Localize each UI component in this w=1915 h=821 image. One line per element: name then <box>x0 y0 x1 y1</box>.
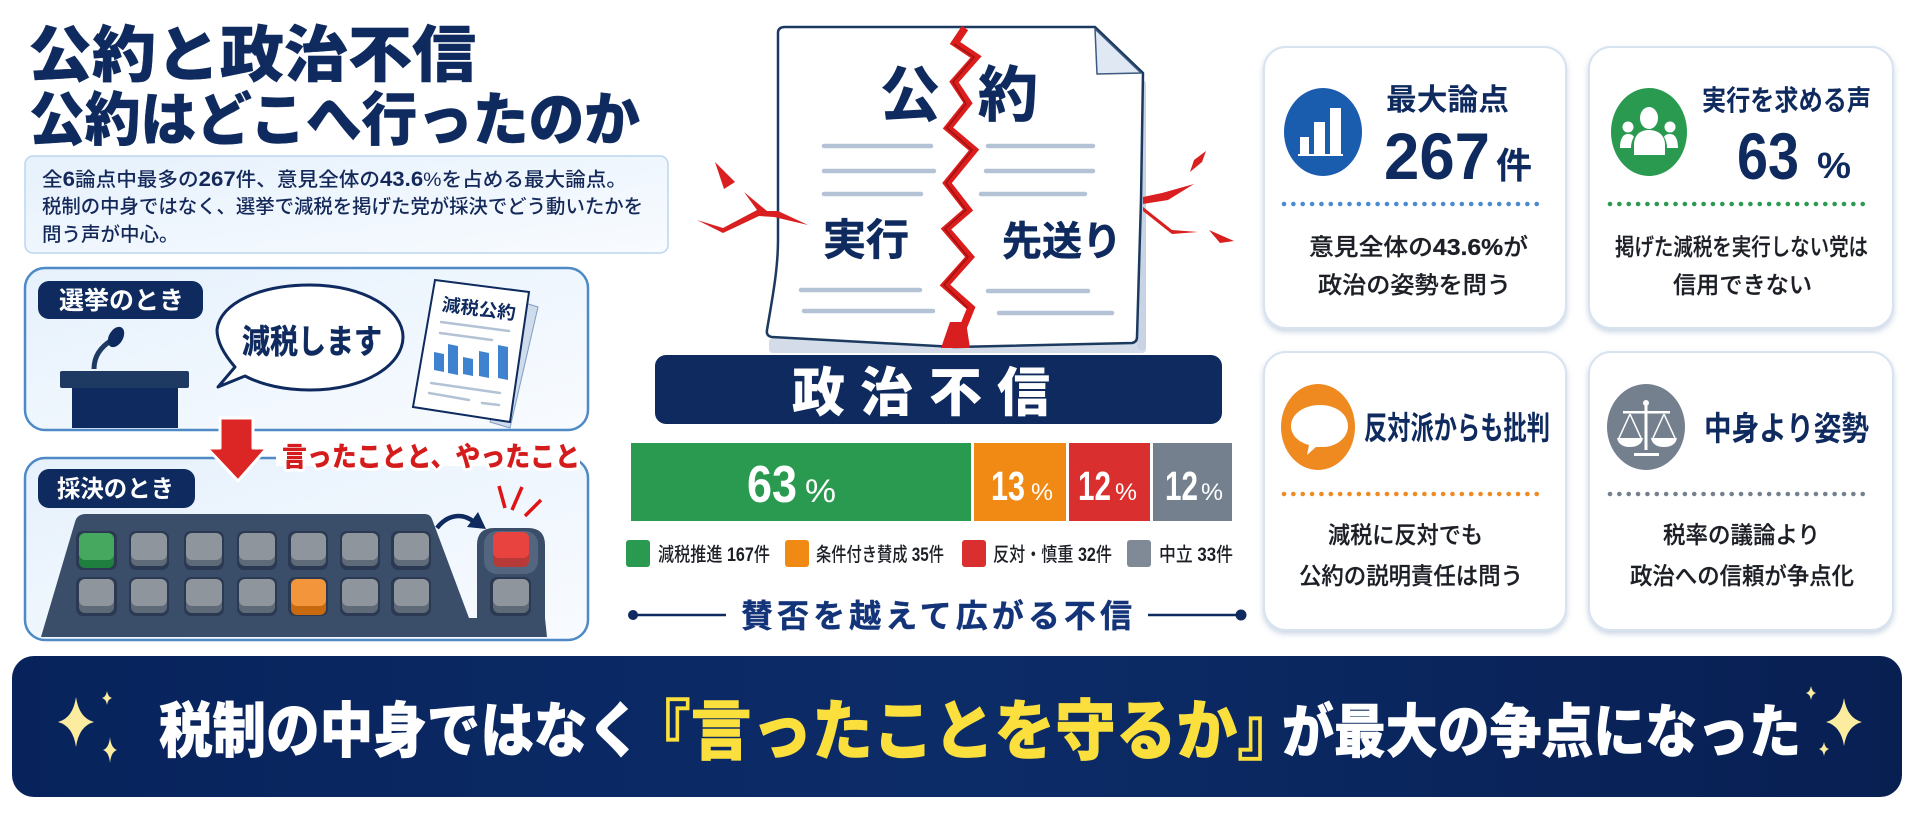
conclusion text: が最大の争点になった <box>1282 700 1801 765</box>
description <box>1299 522 1523 589</box>
summary text box: 問う声が中心。 <box>42 224 179 246</box>
arrow: red down arrow <box>207 418 267 481</box>
conclusion text: 『言ったことを守るか』 <box>630 694 1298 768</box>
description: 政治への信頼が争点化 <box>1630 563 1854 589</box>
conclusion text: 税制の中身ではなく <box>159 698 641 765</box>
tag: election: 選挙のとき <box>59 287 184 315</box>
red alert ticks <box>499 486 541 516</box>
icon: sparkles left <box>58 691 117 763</box>
label: implement: 実行 <box>823 217 909 265</box>
description: 減税に反対でも <box>1328 522 1483 548</box>
stat: 267: 件 <box>1496 145 1532 186</box>
card: biggest issue <box>1264 47 1566 328</box>
bar: opposed 12% <box>1069 443 1150 521</box>
description <box>1630 522 1854 589</box>
bar: neutral 12%: % <box>1201 479 1223 506</box>
bar: conditional 13%: 13 <box>991 463 1025 509</box>
central crack <box>941 28 976 348</box>
description: 税率の議論より <box>1663 522 1820 548</box>
bar: opposed 12%: 12 <box>1078 463 1111 509</box>
document text lines <box>801 146 1112 313</box>
stacked bar chart <box>631 443 1232 521</box>
card: criticism from opponents <box>1264 352 1566 630</box>
voting buttons <box>76 531 531 616</box>
illustration: torn pledge document <box>697 27 1234 353</box>
stat: 267: 267 <box>1384 119 1490 193</box>
heading: 実行を求める声 <box>1702 85 1871 116</box>
summary text box: 全6論点中最多の 267件、意見全体の 43.6%を占める最大論点。 <box>42 168 627 191</box>
summary text box: 税制の中身ではなく、選挙で減税を掲げた党が採決でどう動いたかを <box>42 196 643 218</box>
tag: election <box>38 281 203 319</box>
description: 信用できない <box>1673 272 1812 298</box>
side cracks and shards <box>697 151 1234 243</box>
document sheet <box>767 27 1146 353</box>
bar: promote 63%: 63 <box>747 456 797 514</box>
card: stance over substance <box>1589 352 1893 630</box>
speech bubble <box>217 285 403 390</box>
legend <box>626 540 1233 567</box>
speech bubble: 減税します <box>242 323 382 360</box>
stat: 63% <box>1737 119 1851 193</box>
document heading: 約 <box>978 62 1038 129</box>
panel: vote time <box>25 458 588 640</box>
stat: 63%: % <box>1817 145 1851 186</box>
description: 意見全体の 43.6%が <box>1309 234 1528 260</box>
title: 公約と政治不信 <box>28 21 476 89</box>
icon: sparkles right <box>1806 686 1862 756</box>
icon: scales <box>1607 384 1685 470</box>
heading: 反対派からも批判 <box>1364 410 1550 446</box>
subheading: distrust spreads beyond pro and con <box>628 598 1246 634</box>
voting board <box>41 486 547 637</box>
bar: promote 63%: % <box>805 473 836 509</box>
description: 公約の説明責任は問う <box>1299 563 1523 589</box>
heading: 中身より姿勢 <box>1704 410 1869 447</box>
description: 政治の姿勢を問う <box>1318 272 1511 298</box>
document heading: 公 <box>880 62 940 129</box>
icon: tax cut pledge document <box>413 280 538 428</box>
label: postpone: 先送り <box>1002 220 1122 264</box>
legend: 減税推進 167件 <box>658 544 770 566</box>
icon: tax cut pledge document: 減税公約 <box>441 294 517 324</box>
card: voices demanding action <box>1589 47 1893 328</box>
description <box>1615 234 1868 298</box>
title: 公約はどこへ行ったのか <box>29 88 640 153</box>
summary text box <box>25 156 668 253</box>
legend: 条件付き賛成 35件 <box>816 544 944 566</box>
title <box>28 21 640 153</box>
heading: 最大論点 <box>1386 84 1509 117</box>
icon: podium with microphone <box>60 324 189 428</box>
bar: neutral 12% <box>1153 443 1232 521</box>
legend: 中立 33件 <box>1159 544 1233 566</box>
subheading: distrust spreads beyond pro and con: 賛否を越えて広がる不信 <box>741 598 1132 634</box>
conclusion text <box>159 694 1801 768</box>
bar: promote 63% <box>631 443 971 521</box>
callout: what was said and done: 言ったことと、やったこと <box>282 441 580 472</box>
bar: conditional 13%: % <box>1031 479 1053 506</box>
icon: people <box>1611 88 1687 176</box>
arrow: to red button <box>437 512 486 529</box>
icon: bar chart <box>1284 88 1362 176</box>
document heading <box>880 62 1038 129</box>
panel: election time <box>25 268 588 430</box>
bar: neutral 12%: 12 <box>1165 463 1198 509</box>
bar: conditional 13% <box>974 443 1066 521</box>
tag: vote: 採決のとき <box>57 476 174 503</box>
stat: 63%: 63 <box>1737 119 1799 193</box>
bar: opposed 12%: % <box>1115 479 1137 506</box>
legend: 反対・慎重 32件 <box>993 544 1112 566</box>
tag: vote <box>38 469 195 508</box>
description <box>1309 234 1528 298</box>
banner: political distrust: 政治不信 <box>792 364 1050 423</box>
icon: speech bubble <box>1281 384 1355 470</box>
banner: political distrust <box>655 355 1222 424</box>
description: 掲げた減税を実行しない党は <box>1615 234 1868 260</box>
bottom conclusion banner <box>12 656 1902 797</box>
